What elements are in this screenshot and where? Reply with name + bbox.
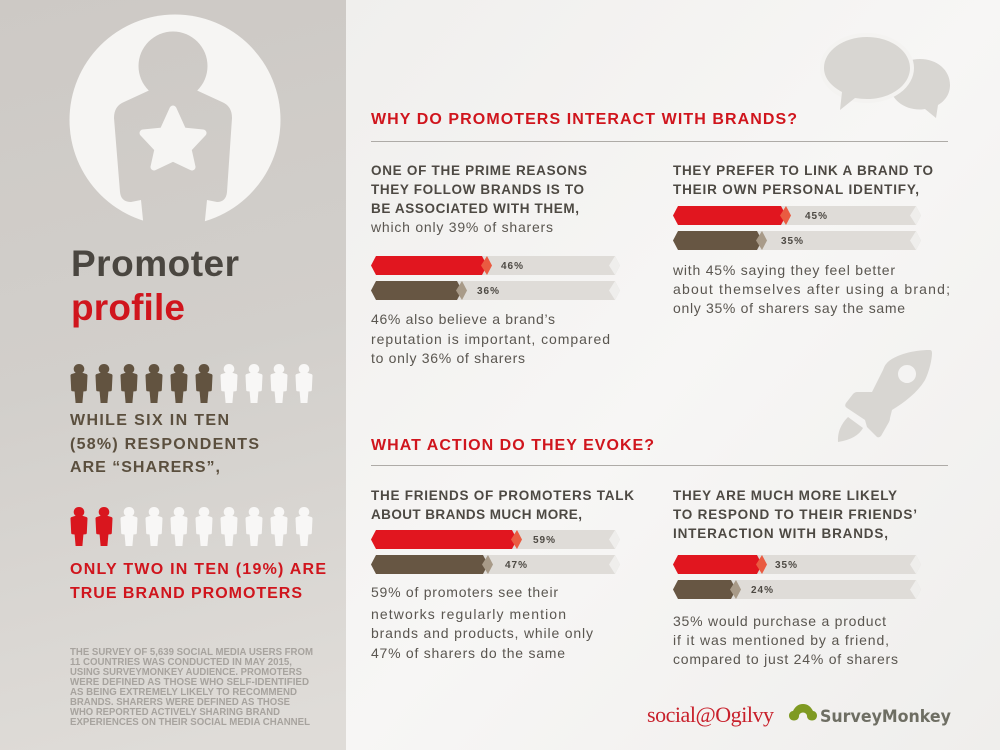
text: sharers statement: WHILE SIX IN TEN [70, 412, 229, 429]
block: respond to friends: 35% would purchase a product [673, 613, 886, 629]
block: associated with brands: BE ASSOCIATED WITH THEM, [371, 201, 579, 216]
block: friends talk about brands: networks regularly mention [371, 606, 566, 622]
text: survey footnote: BRANDS. SHARERS WERE DEFINED AS THOSE [70, 697, 290, 708]
bar chart: 59 vs 47: 59% [533, 535, 555, 546]
block: respond to friends: TO RESPOND TO THEIR FRIENDS’ [673, 507, 917, 522]
panel: promoter profile sidebar [0, 0, 346, 750]
block: personal identity: with 45% saying they feel better [672, 262, 895, 278]
block: respond to friends: INTERACTION WITH BRANDS, [673, 526, 888, 541]
block: personal identity: only 35% of sharers say the same [673, 300, 905, 316]
bar chart: 45 vs 35 [673, 206, 921, 250]
icon: promoter with star [70, 14, 280, 230]
block: respond to friends [673, 488, 921, 667]
block: associated with brands: THEY FOLLOW BRANDS IS TO [371, 182, 584, 197]
text: survey footnote: WERE DEFINED AS THOSE WHO SELF-IDENTIFIED [70, 677, 309, 688]
bar chart: 46 vs 36 [371, 256, 620, 300]
block: friends talk about brands [371, 488, 634, 661]
block: respond to friends: if it was mentioned by a friend, [673, 632, 889, 648]
logo: SurveyMonkey [789, 704, 951, 727]
text: promoters statement [70, 561, 326, 602]
logo: social@Ogilvy: social@Ogilvy [647, 702, 774, 727]
text: promoters statement: TRUE BRAND PROMOTERS [70, 585, 302, 602]
icon row: two in ten promoters [70, 507, 312, 546]
text: survey footnote: 11 COUNTRIES WAS CONDUCTED IN MAY 2015, [70, 657, 292, 668]
text: survey footnote: USING SURVEYMONKEY AUDIENCE. PROMOTERS [70, 667, 302, 678]
text: sharers statement: (58%) RESPONDENTS [70, 436, 259, 453]
block: associated with brands [370, 163, 620, 366]
bar chart: 45 vs 35: 45% [805, 211, 827, 222]
block: friends talk about brands: ABOUT BRANDS MUCH MORE, [371, 507, 582, 522]
block: personal identity: THEIR OWN PERSONAL IDENTIFY, [673, 182, 919, 197]
text: survey footnote: AS BEING EXTREMELY LIKELY TO RECOMMEND [70, 687, 297, 698]
block: associated with brands: reputation is important, compared [371, 331, 610, 347]
text: survey footnote: WHO REPORTED ACTIVELY SHARING BRAND [70, 707, 280, 718]
text: survey footnote: EXPERIENCES ON THEIR SOCIAL MEDIA CHANNEL [70, 717, 310, 728]
title: Promoter [71, 243, 239, 284]
text: survey footnote [70, 647, 313, 728]
block: personal identity: about themselves after using a brand; [673, 281, 950, 297]
block: friends talk about brands: THE FRIENDS OF PROMOTERS TALK [371, 488, 634, 503]
block: personal identity: THEY PREFER TO LINK A BRAND TO [673, 163, 933, 178]
title [71, 243, 239, 328]
title: profile [71, 287, 185, 328]
block: friends talk about brands: 47% of sharers do the same [371, 645, 565, 661]
bar chart: 35 vs 24 [673, 555, 921, 599]
text: sharers statement: ARE “SHARERS”, [70, 459, 220, 476]
bar chart: 45 vs 35: 35% [781, 236, 803, 247]
block: personal identity [672, 163, 950, 316]
block: associated with brands: 46% also believe a brand’s [371, 311, 555, 327]
icon: rocket [838, 350, 932, 442]
logo: SurveyMonkey: SurveyMonkey [820, 707, 951, 727]
heading: what action: WHAT ACTION DO THEY EVOKE? [371, 437, 654, 454]
text: promoters statement: ONLY TWO IN TEN (19%) ARE [70, 561, 326, 578]
bar chart: 59 vs 47: 47% [505, 560, 527, 571]
block: associated with brands: to only 36% of sharers [371, 350, 525, 366]
icon row: six in ten sharers [70, 364, 312, 403]
heading: why promoters interact: WHY DO PROMOTERS INTERACT WITH BRANDS? [371, 111, 797, 128]
bar chart: 46 vs 36: 36% [477, 286, 499, 297]
bar chart: 59 vs 47 [371, 530, 620, 574]
block: friends talk about brands: 59% of promoters see their [371, 584, 558, 600]
icon: speech bubbles [820, 33, 950, 118]
text: survey footnote: THE SURVEY OF 5,639 SOCIAL MEDIA USERS FROM [70, 647, 313, 658]
block: respond to friends: THEY ARE MUCH MORE LIKELY [673, 488, 897, 503]
bar chart: 35 vs 24: 35% [775, 560, 797, 571]
text: sharers statement [70, 412, 259, 476]
bar chart: 35 vs 24: 24% [751, 585, 773, 596]
block: associated with brands: which only 39% of sharers [370, 219, 553, 235]
block: friends talk about brands: brands and products, while only [371, 625, 593, 641]
block: respond to friends: compared to just 24% of sharers [673, 651, 898, 667]
block: associated with brands: ONE OF THE PRIME REASONS [371, 163, 587, 178]
bar chart: 46 vs 36: 46% [501, 261, 523, 272]
